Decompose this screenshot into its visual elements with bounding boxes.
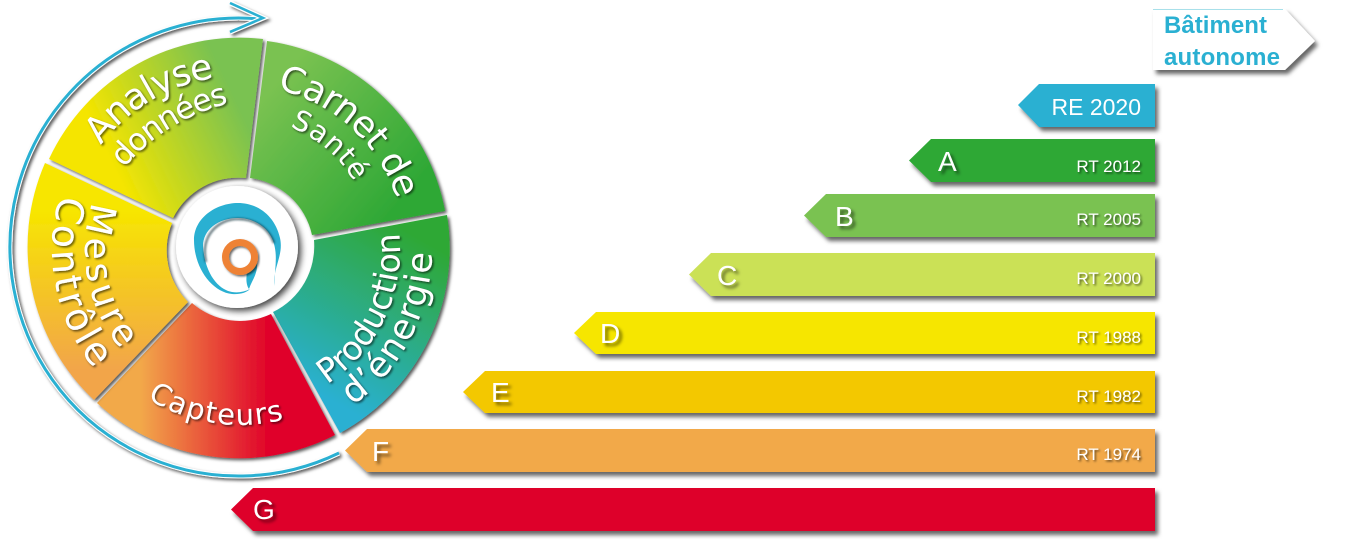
bar: F RT 1974: F xyxy=(372,436,389,467)
bar: C RT 2000 xyxy=(689,253,1155,296)
bar: B RT 2005: RT 2005 xyxy=(1076,210,1141,229)
bar: B RT 2005: B xyxy=(835,201,854,232)
segment: Mesure Contrôle: Mesure xyxy=(84,205,136,349)
badge: Bâtiment autonome xyxy=(1153,9,1315,71)
segment: Carnet de Santé: Santé xyxy=(292,110,373,182)
bar: A RT 2012: RT 2012 xyxy=(1076,157,1141,176)
bar: F RT 1974 xyxy=(345,429,1155,472)
segment: Mesure Contrôle: Contrôle xyxy=(52,199,110,368)
segment: Mesure Contrôle xyxy=(27,163,192,404)
bar: C RT 2000: RT 2000 xyxy=(1076,269,1141,288)
bar: G xyxy=(231,488,1155,531)
segment: Production d'énergie xyxy=(273,215,454,436)
badge: Bâtiment autonome: autonome xyxy=(1164,44,1280,71)
circular arrow around wheel xyxy=(10,3,339,476)
segment: Analyse données xyxy=(49,37,267,222)
segment: Capteurs: Capteurs xyxy=(152,384,285,428)
wheel xyxy=(27,37,454,463)
bar: B RT 2005 xyxy=(804,194,1155,237)
segment: Analyse données: Analyse xyxy=(88,60,214,147)
bar: RE 2020 xyxy=(1018,84,1155,127)
segment: Production d'énergie: d’énergie xyxy=(346,254,436,404)
segment: Production d'énergie: Production xyxy=(316,236,403,385)
bar: F RT 1974: RT 1974 xyxy=(1076,445,1141,464)
bar: RE 2020: RE 2020 xyxy=(1051,94,1141,120)
bar: D RT 1988: RT 1988 xyxy=(1076,328,1141,347)
bar: D RT 1988 xyxy=(574,312,1155,354)
bar: A RT 2012 xyxy=(909,139,1155,182)
bar: E RT 1982: RT 1982 xyxy=(1076,387,1141,406)
bar: D RT 1988: D xyxy=(600,318,620,349)
bar: E RT 1982 xyxy=(463,371,1155,413)
badge: Bâtiment autonome: Bâtiment xyxy=(1164,12,1267,39)
centre logo xyxy=(176,186,298,308)
segment: Carnet de Santé xyxy=(250,41,449,239)
bar: E RT 1982: E xyxy=(491,377,510,408)
bar: A RT 2012: A xyxy=(938,146,957,177)
segment: Analyse données: données xyxy=(115,88,229,167)
segment: Capteurs xyxy=(97,303,338,463)
bar: G: G xyxy=(253,494,275,525)
segment: Carnet de Santé: Carnet de xyxy=(282,66,416,199)
bar: C RT 2000: C xyxy=(717,260,737,291)
